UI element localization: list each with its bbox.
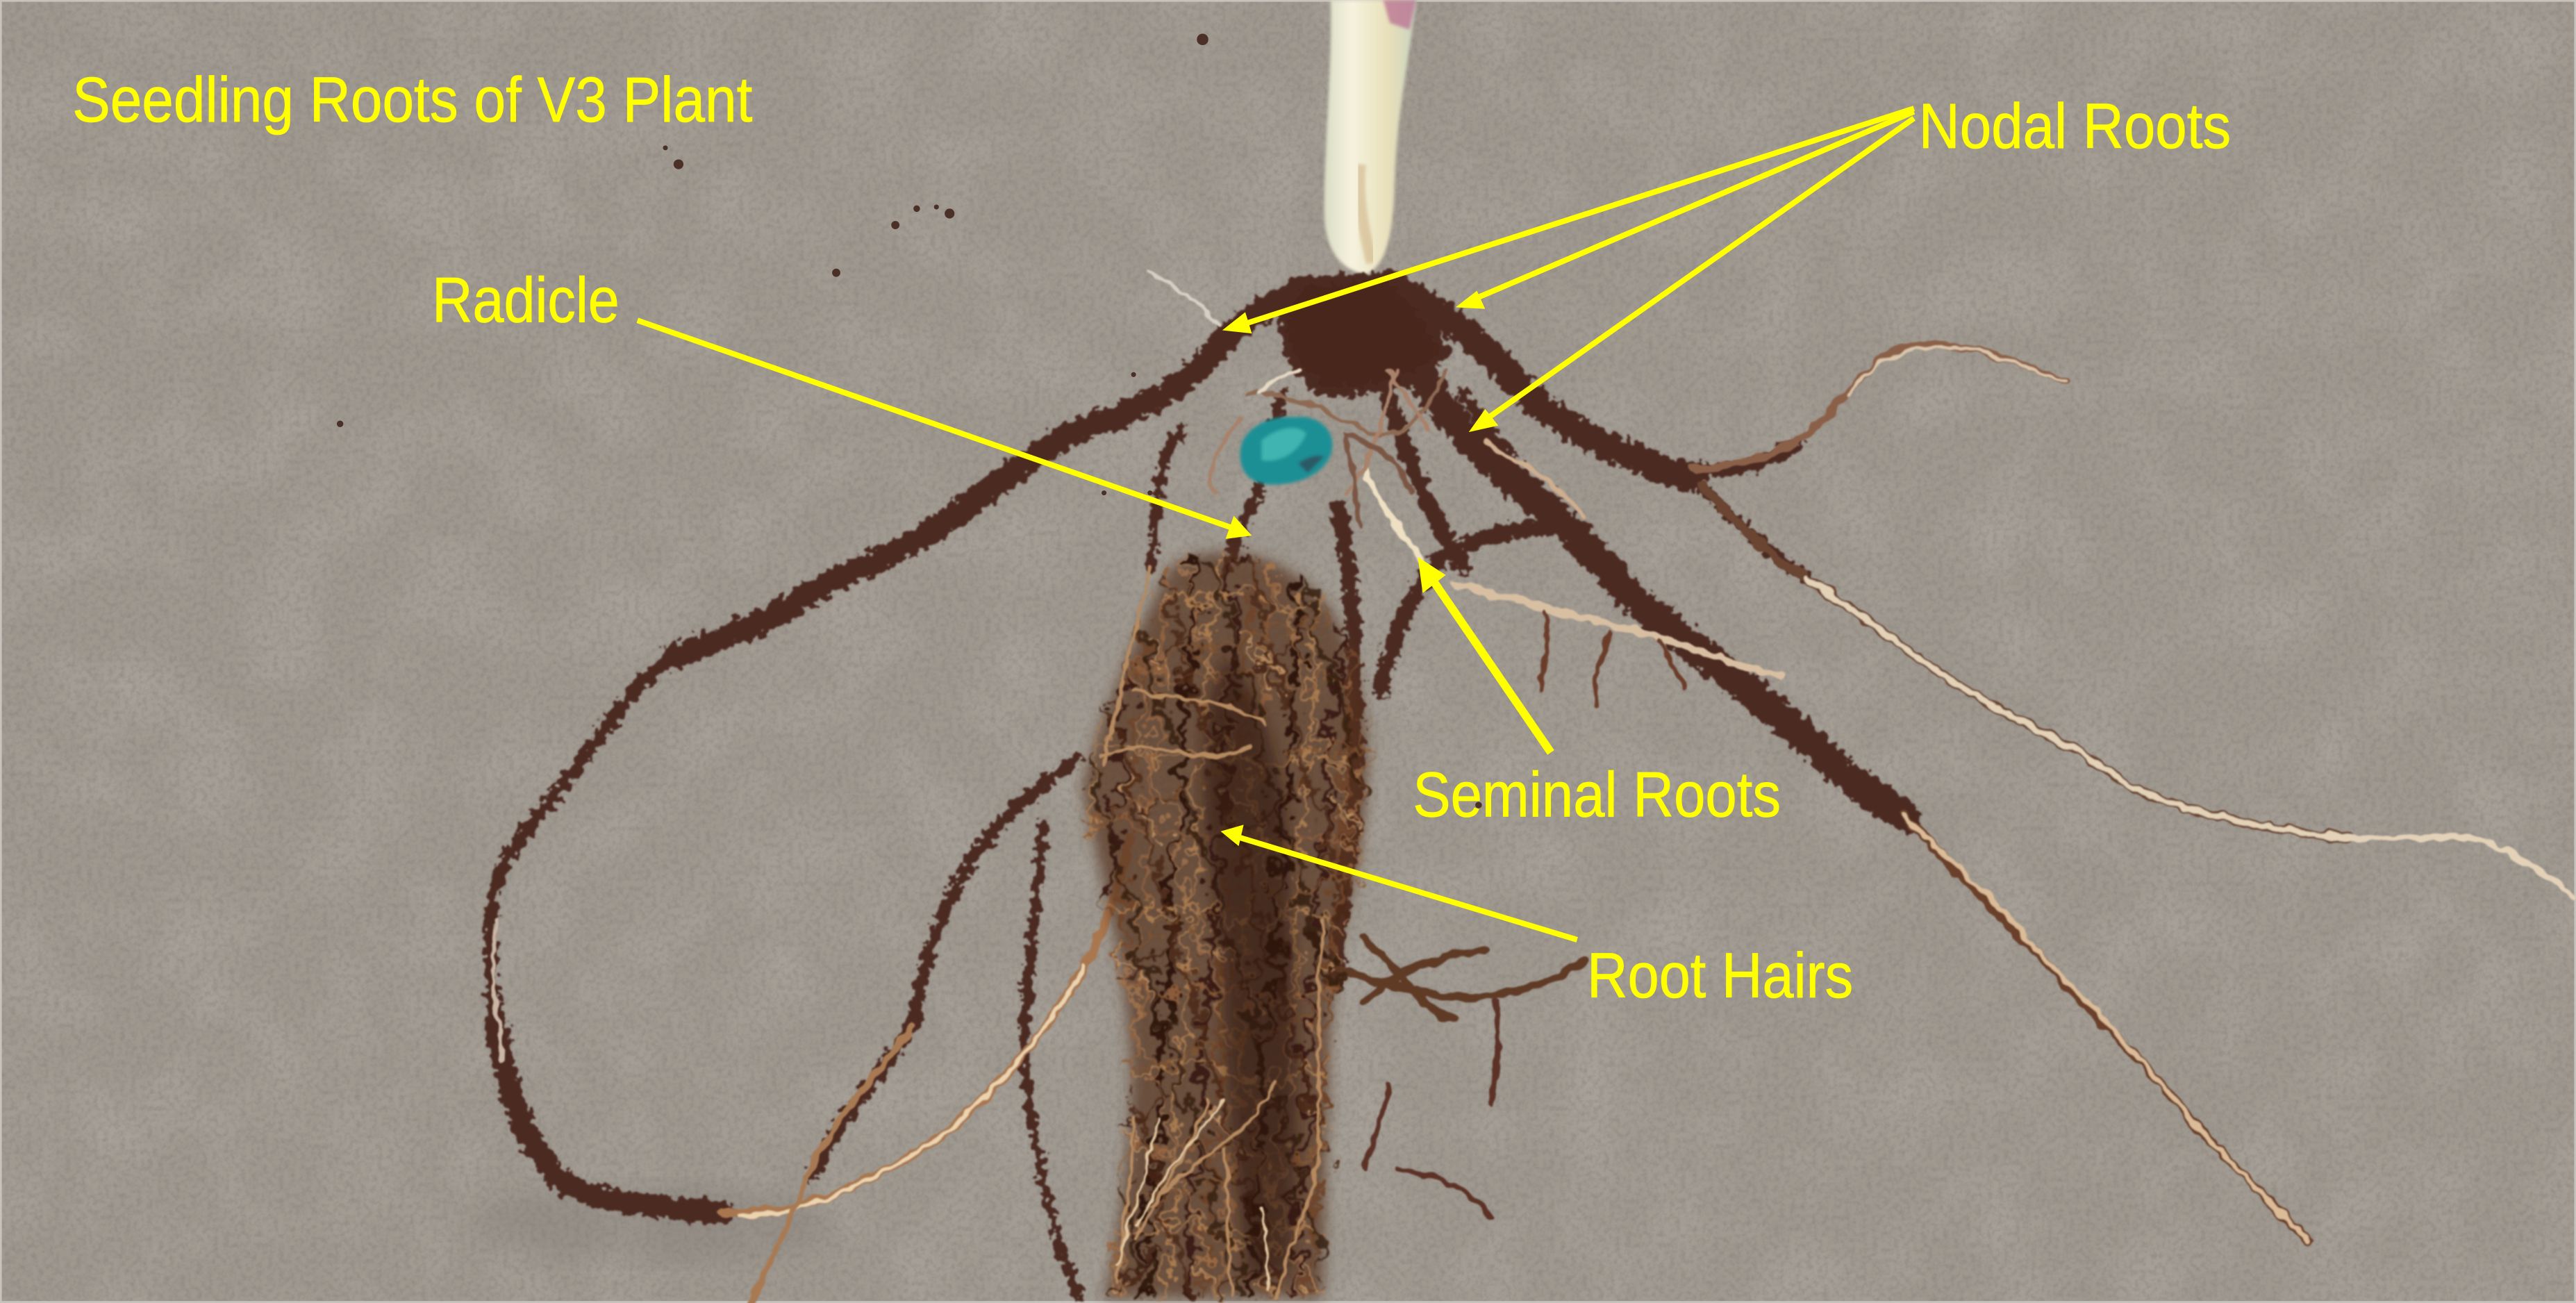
arrow: seminal roots	[1418, 557, 1551, 752]
soil specks	[337, 33, 1482, 808]
upper crown tangle	[1211, 370, 1586, 526]
root system	[490, 271, 2573, 1301]
label: seminal roots: Seminal Roots	[1413, 758, 1781, 831]
label: root hairs: Root Hairs	[1587, 939, 1853, 1011]
central root hair mass	[1081, 552, 1368, 1298]
label: radicle: Radicle	[432, 264, 620, 336]
nodal roots: thick dark sections	[490, 276, 1906, 1298]
arrow: radicle	[638, 320, 1252, 539]
title: seedling roots: Seedling Roots of V3 Plant	[72, 63, 752, 135]
plant stem	[1324, 0, 1416, 274]
pale root tips	[493, 271, 2573, 1301]
icon: blue-green seed	[1240, 417, 1333, 485]
arrows: nodal roots	[1222, 108, 1914, 432]
label: nodal roots: Nodal Roots	[1919, 90, 2231, 162]
arrow: root hairs	[1221, 824, 1577, 940]
